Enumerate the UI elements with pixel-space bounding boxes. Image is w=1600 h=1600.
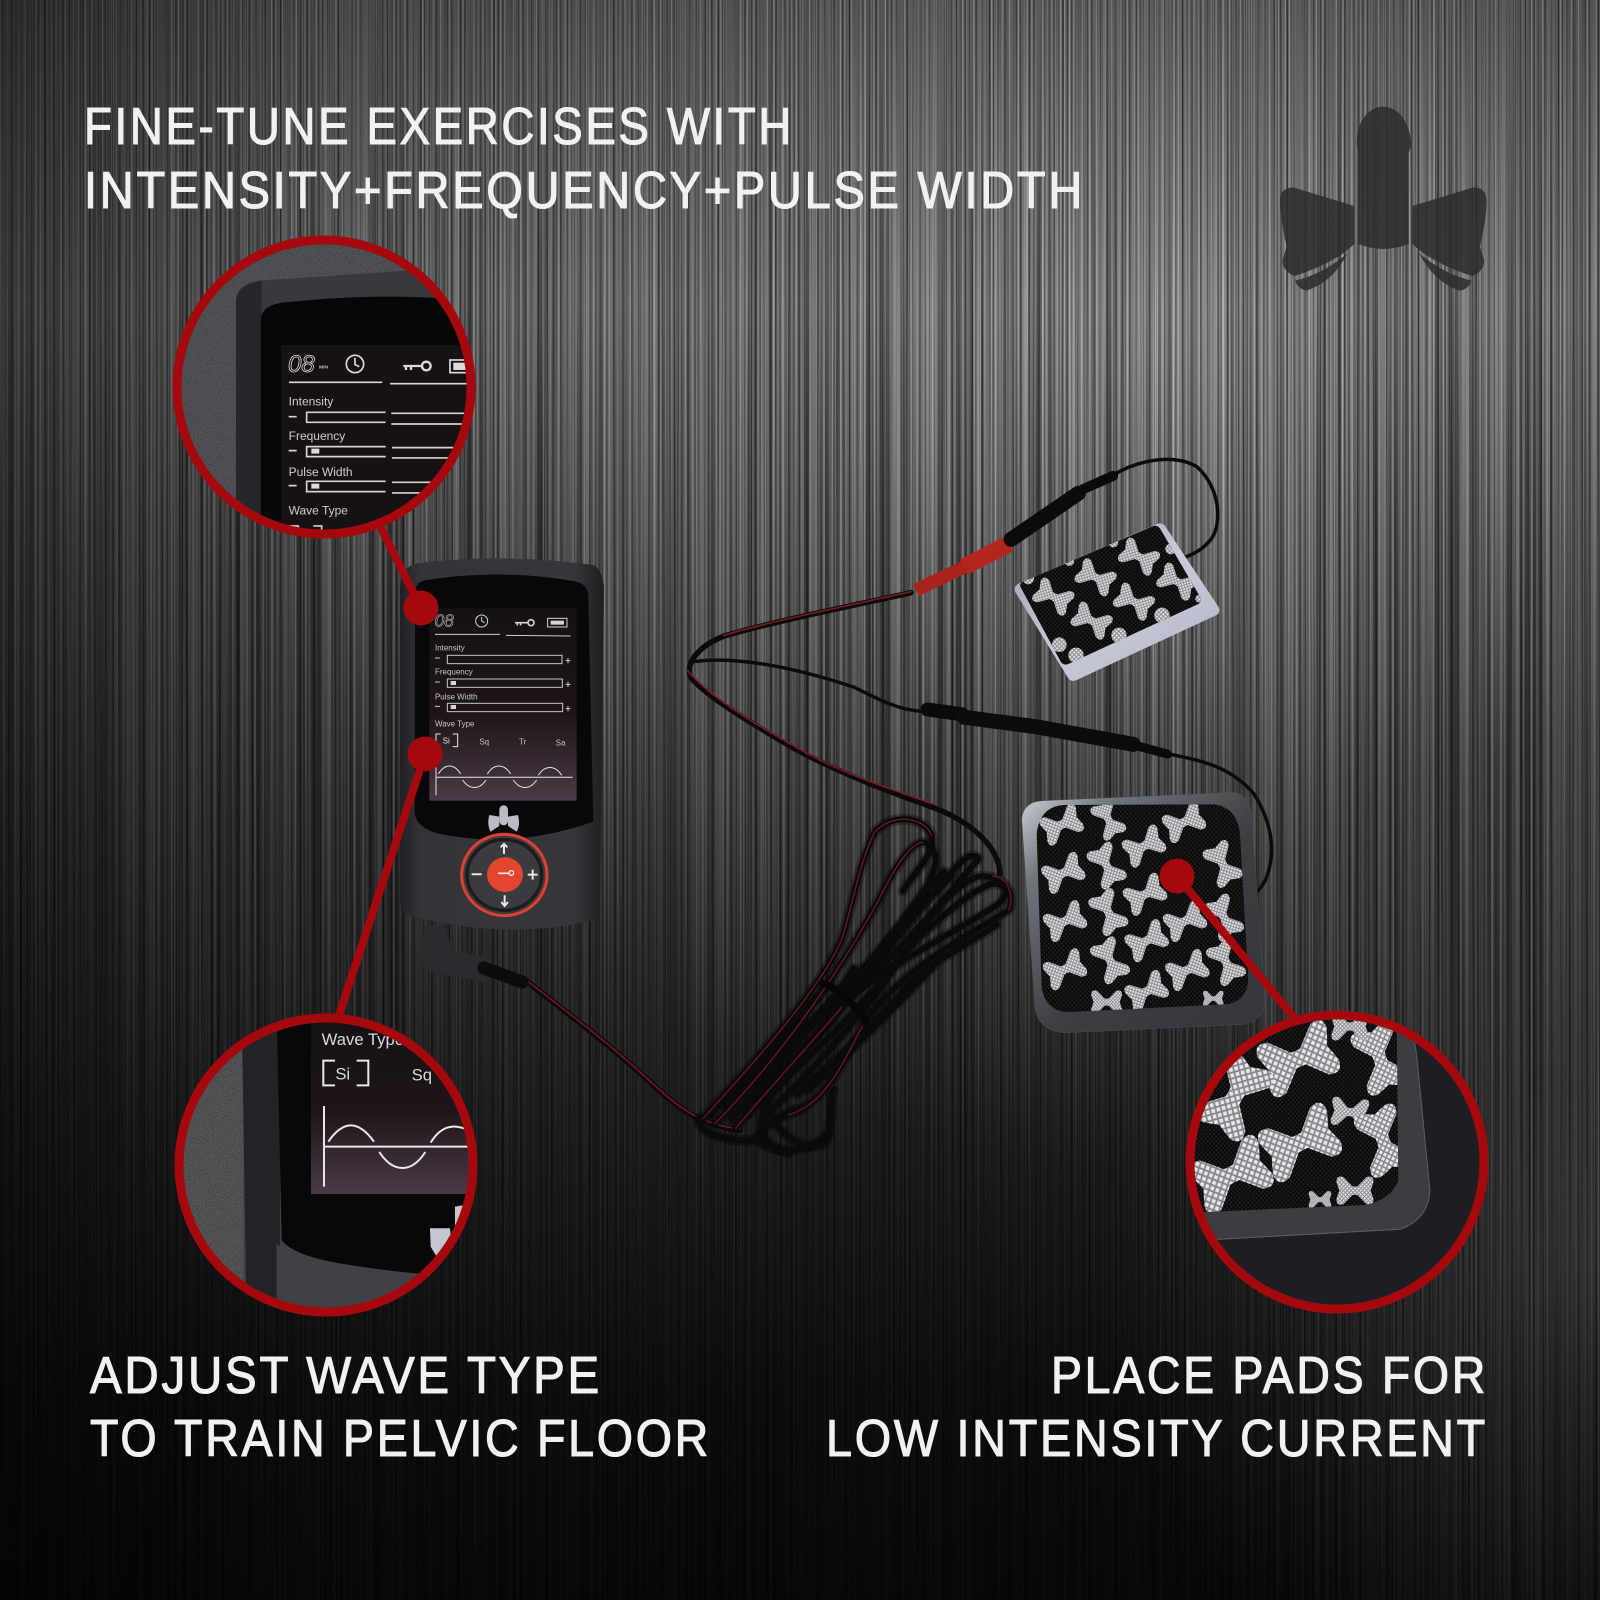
title: FINE-TUNE EXERCISES WITH	[84, 98, 794, 156]
icon: key	[515, 620, 534, 626]
cable: device lead to coil	[525, 979, 740, 1130]
cables: wire coil and splitter	[688, 459, 1272, 1153]
magnified bow fragment	[430, 1205, 463, 1256]
settings labels: Frequency	[435, 667, 473, 676]
cable: red and black main run	[688, 592, 1000, 874]
caption: wave type	[90, 1347, 711, 1468]
key glyph	[498, 871, 509, 876]
magnified bars	[288, 412, 464, 530]
magnified labels: Pulse Width	[289, 465, 353, 479]
ring: top circle	[177, 240, 471, 534]
connector: right-angle device plug	[420, 925, 522, 982]
connector: red plug	[916, 544, 1009, 590]
settings labels: Pulse Width	[435, 693, 478, 702]
caption: pads: LOW INTENSITY CURRENT	[826, 1410, 1488, 1468]
timer digits: 08	[435, 611, 454, 631]
magnified readout: MIN	[319, 364, 329, 370]
callout line: wave circle	[338, 754, 425, 1018]
cable: wire to square pad	[1169, 754, 1272, 898]
callout line: pad circle	[1177, 876, 1296, 1020]
surface texture	[183, 244, 406, 367]
settings labels: Intensity	[435, 643, 465, 652]
settings labels: Tr	[519, 738, 527, 747]
caption: wave type: ADJUST WAVE TYPE	[90, 1347, 602, 1405]
surface texture	[184, 1050, 244, 1281]
caption: pads	[826, 1347, 1488, 1468]
band: cable tie	[821, 983, 866, 1020]
cable: black branch	[691, 660, 923, 711]
ring: pad circle	[1190, 1015, 1484, 1309]
caption: pads: PLACE PADS FOR	[1051, 1347, 1488, 1405]
magnified device shell	[236, 270, 435, 315]
surface texture lower	[182, 366, 236, 499]
magnified device side	[242, 1031, 280, 1298]
device: stimulator unit	[400, 558, 604, 930]
magnified labels: Intensity	[289, 394, 333, 408]
magnified labels	[289, 394, 353, 518]
settings labels: Si	[443, 737, 450, 746]
connector: black upper plug	[1011, 476, 1113, 539]
top dividers	[435, 634, 571, 636]
magnified readout: 08	[288, 351, 315, 378]
panel: magnified pad corner	[1183, 1009, 1490, 1316]
pad surface with bows	[1036, 804, 1248, 1012]
magnified table surface	[184, 1050, 384, 1283]
magnified surface	[1220, 1043, 1480, 1304]
connector: black lower plug	[927, 709, 1167, 754]
screen bezel	[415, 575, 593, 839]
magnified wave labels	[322, 1030, 432, 1085]
magnified labels: Frequency	[289, 429, 345, 443]
panel: magnified screen top	[170, 233, 488, 552]
title: INTENSITY+FREQUENCY+PULSE WIDTH	[84, 162, 1085, 220]
cable: wire to small pad	[1115, 459, 1218, 557]
icon: clock	[476, 615, 488, 627]
panel: magnified wave type	[173, 1010, 484, 1320]
center key button	[487, 857, 523, 892]
magnified wave labels: Sq	[412, 1066, 432, 1085]
magnified device face	[276, 1244, 280, 1300]
bar fill levels	[451, 681, 456, 709]
magnified wave labels: Si	[335, 1064, 350, 1083]
magnified screen	[281, 345, 466, 530]
waveform	[436, 766, 573, 795]
device body	[400, 558, 604, 930]
panel: large square electrode pad	[1022, 792, 1265, 1033]
magnified pad backing	[1204, 1033, 1430, 1240]
magnified bezel	[260, 296, 460, 523]
setting bars	[435, 655, 571, 747]
caption: wave type: TO TRAIN PELVIC FLOOR	[90, 1410, 711, 1468]
ring: wave circle	[179, 1018, 473, 1312]
title	[84, 98, 1085, 220]
callout dot: pad	[1160, 858, 1194, 894]
icon: brand logo	[1280, 107, 1487, 291]
magnified pad surface	[1194, 1020, 1398, 1212]
magnified table surface	[182, 244, 406, 499]
icon: device bow logo	[488, 805, 519, 832]
magnified labels: Wave Type	[289, 504, 348, 518]
pad backing	[1021, 529, 1213, 675]
panel: small electrode pad	[1014, 523, 1220, 681]
magnified wave labels: Wave Type	[322, 1030, 404, 1049]
callout dot: top	[404, 590, 438, 626]
settings labels: Wave Type	[435, 720, 475, 729]
control ring	[462, 834, 547, 916]
magnified graph	[323, 1061, 483, 1187]
settings labels	[435, 643, 566, 747]
settings labels: Sq	[479, 738, 489, 747]
magnified readout	[288, 354, 466, 384]
screen	[429, 608, 577, 801]
pad backing	[1022, 792, 1265, 1033]
callout dot: wave	[408, 736, 442, 772]
pad surface with bows	[1020, 526, 1201, 665]
settings labels: Sa	[556, 738, 566, 747]
callout line: top circle	[380, 526, 421, 608]
direction arrows	[472, 844, 538, 906]
magnified screen	[311, 1022, 468, 1194]
icon: battery	[548, 618, 567, 627]
magnified bezel	[277, 1023, 466, 1274]
